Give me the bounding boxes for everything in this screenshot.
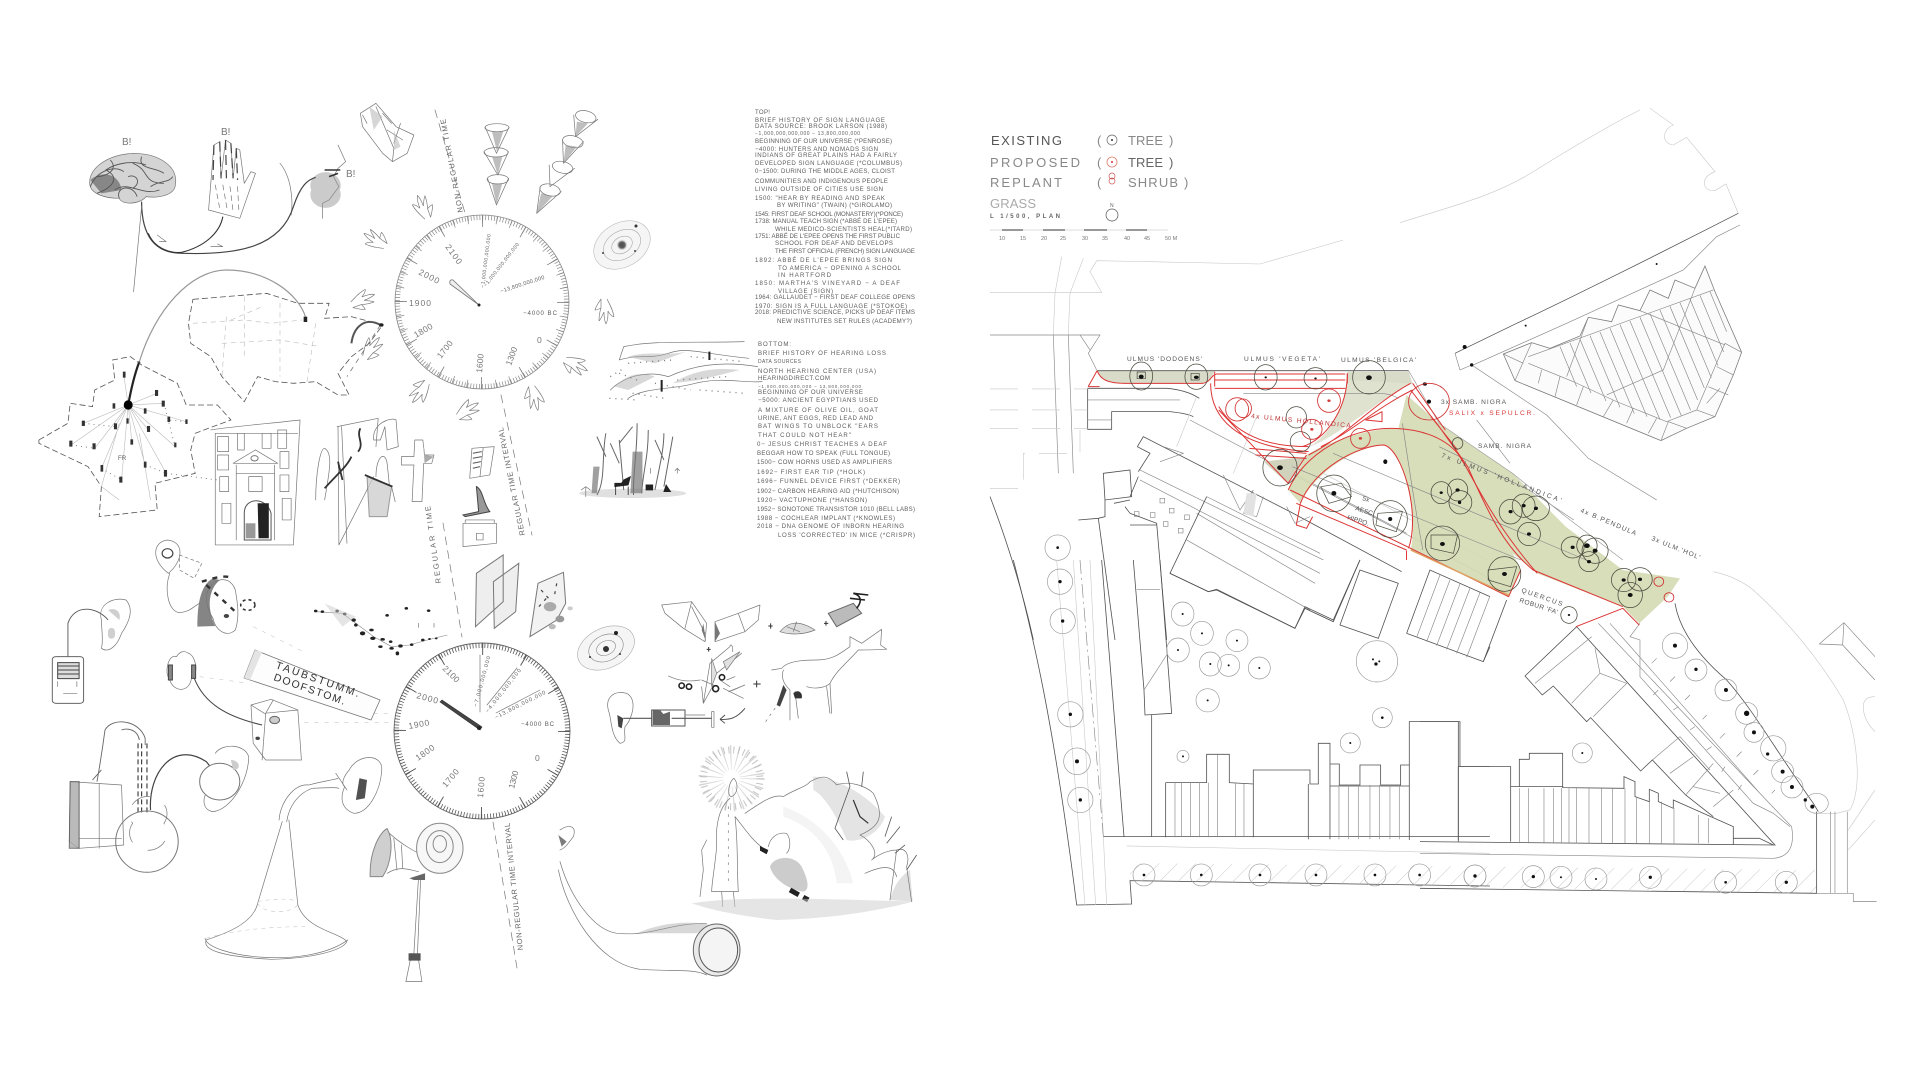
drawing: tall gramophone horn to ear [205,757,382,959]
text block: top notes, brief history of sign language: 1545: FIRST DEAF SCHOOL (MONASTERY)(*PONCE) [755,211,903,218]
text block: bottom notes, brief history of hearing loss: DATA SOURCES [758,359,802,365]
top-left sketch: brain, hand and mouth with tubes [90,140,346,292]
sign: Taubstumm Doofstom torn paper label: DOOFSTOM. [272,672,347,708]
icon: headset wearer connected to box [167,627,396,760]
labels: tree species names: 3x ULM.'HOL' [1650,535,1701,561]
drawing: school building [211,420,300,545]
text block: top notes, brief history of sign language: BEGINNING OF OUR UNIVERSE (*PENROSE) [755,138,892,145]
axis labels: regular and non-regular time: REGULAR TIME INTERVAL [496,427,527,536]
base plan: hatched street tree strip [1130,863,1817,893]
text block: top notes, brief history of sign language: DATA SOURCE: BROOK LARSON (1988) [755,123,887,130]
legend: tree and shrub key with scale and north arrow: 20 [1041,236,1047,242]
dial: hearing loss timeline clock: 2100 [441,663,462,685]
dial: sign language timeline clock: 1700 [435,338,455,360]
dial: sign language timeline clock: −1,000,000,000,000 [483,242,521,288]
dial: sign language timeline clock: 1900 [409,298,431,308]
icon: behind-the-ear device with pocket receiver [52,599,130,703]
drawing: DNA strand and dots [314,603,447,655]
drawing: saint with halo healing a deaf child [692,750,913,920]
drawing: snail shell ear trumpet on stand [370,823,463,982]
icon: galaxy upper [585,211,659,279]
icon: galaxy lower [570,617,642,679]
text block: bottom notes, brief history of hearing loss: 1692− FIRST EAR TIP (*HOLK) [757,469,865,476]
icon: cross [401,440,434,502]
text block: top notes, brief history of sign language: SCHOOL FOR DEAF AND DEVELOPS [775,240,893,247]
text block: top notes, brief history of sign language: TOP! [755,109,770,116]
dial: sign language timeline clock: 1600 [474,353,486,373]
text block: bottom notes, brief history of hearing loss: 1952− SONOTONE TRANSISTOR 1010 (BELL LABS) [757,506,915,513]
drawing: bat wing, moss, ant, olive, goat remedy recipe with syringe and ear [608,593,887,743]
text block: bottom notes, brief history of hearing loss: 1902− CARBON HEARING AID (*HUTCHISON) [757,488,899,495]
legend: tree and shrub key with scale and north arrow: ( [1097,155,1102,170]
axis labels: regular and non-regular time: NON-REGULAR TIME INTERVAL [503,822,525,951]
dial: hearing loss timeline clock: 1900 [408,717,430,731]
text block: bottom notes, brief history of hearing loss: BEGGAR HOW TO SPEAK (FULL TONGUE) [757,450,890,457]
labels: tree species names: AESC. [1354,505,1376,518]
text block: top notes, brief history of sign language: 1738: MANUAL TEACH SIGN (*ABBÉ DE L'EPEE) [755,218,897,225]
labels: tree species names: 4x ULMUS HOLLANDICA [1251,413,1352,430]
legend: tree and shrub key with scale and north arrow: ( [1097,175,1102,190]
text block: bottom notes, brief history of hearing loss: LOSS 'CORRECTED' IN MICE (*CRISPR) [778,532,915,539]
dial: sign language timeline clock: −4000 BC [523,310,558,317]
text block: bottom notes, brief history of hearing loss: THAT COULD NOT HEAR" [758,432,851,439]
legend: tree and shrub key with scale and north arrow: ( [1097,133,1102,148]
dial: hearing loss timeline clock: 2000 [415,690,440,706]
legend: tree and shrub key with scale and north arrow: 35 [1102,236,1108,242]
dial: sign language timeline clock: −1,000,000,000,000 [480,234,493,288]
legend: tree and shrub key with scale and north arrow: 10 [999,236,1005,242]
text block: top notes, brief history of sign language: BRIEF HISTORY OF SIGN LANGUAGE [755,117,885,124]
drawing: long ear trumpet tube [558,827,740,976]
labels: B! exclamations: B! [346,169,355,180]
drawing: hilly landscape with figures [609,342,762,400]
drawing: battery box, body-worn aid and ear with tubes [69,722,249,872]
text block: bottom notes, brief history of hearing loss: NORTH HEARING CENTER (USA) [758,368,876,375]
axis labels: regular and non-regular time: REGULAR TIME [423,505,443,584]
dial: hearing loss timeline clock: 1300 [506,769,521,790]
label: FR on map: FR [118,455,127,462]
dial: sign language timeline clock [395,215,569,389]
drawing: shaded coastline map with birds [745,772,917,902]
text block: bottom notes, brief history of hearing loss: 0− JESUS CHRIST TEACHES A DEAF [757,441,887,448]
text block: top notes, brief history of sign language: INDIANS OF GREAT PLAINS HAD A FAIRLY [755,152,897,159]
base plan: roads and buildings west side [990,240,1487,640]
labels: tree species names [1127,356,1701,616]
dial: hearing loss timeline clock: −4,000,000,000 [485,668,523,714]
legend: tree and shrub key with scale and north arrow: ) [1169,155,1173,170]
dial: sign language timeline clock: 1300 [503,345,519,367]
text block: top notes, brief history of sign language: TO AMERICA − OPENING A SCHOOL [778,265,902,272]
text block: top notes, brief history of sign language: DEVELOPED SIGN LANGUAGE (*COLUMBUS) [755,160,902,167]
base plan: southern buildings, road and trees [1013,560,1490,905]
dial: hearing loss timeline clock: −13,800,000,000 [494,690,547,721]
legend: tree and shrub key with scale and north arrow: ) [1169,133,1173,148]
text block: top notes, brief history of sign language: LIVING OUTSIDE OF CITIES USE SIGN [755,186,883,193]
text block: top notes, brief history of sign language: 1964: GALLAUDET − FIRST DEAF COLLEGE OPENS [755,294,915,301]
legend: tree and shrub key with scale and north arrow: L 1/500, PLAN [990,214,1060,220]
text block: bottom notes, brief history of hearing loss: BAT WINGS TO UNBLOCK "EARS [758,423,878,430]
legend: tree and shrub key with scale and north arrow: PROPOSED [990,155,1080,170]
labels: tree species names: SALIX x SEPULCR. [1449,410,1535,417]
text block: top notes, brief history of sign language: BY WRITING" (TWAIN) (*GIROLAMO) [777,202,892,209]
text block: bottom notes, brief history of hearing loss: −5000: ANCIENT EGYPTIANS USED [758,397,879,404]
text block: top notes, brief history of sign language: 1500: "HEAR BY READING AND SPEAK [755,195,885,202]
legend: tree and shrub key with scale and north arrow: 40 [1124,236,1130,242]
legend: tree and shrub key with scale and north arrow: 45 [1144,236,1150,242]
dial: hearing loss timeline clock: 1800 [413,742,437,763]
base plan: roof of hatched building and north east road [1400,108,1742,500]
text block: top notes, brief history of sign language: NEW INSTITUTES SET RULES (ACADEMY?) [777,318,912,325]
dial: hearing loss timeline clock: −4000 BC [521,721,555,728]
text block: top notes, brief history of sign language: 1850: MARTHA'S VINEYARD − A DEAF [755,280,900,287]
legend: tree and shrub key with scale and north arrow: TREE [1128,155,1163,170]
labels: tree species names: ULMUS 'DODOENS' [1127,356,1202,363]
icon: open book with building [360,103,414,162]
base plan: south east triangle building and road [1420,572,1877,902]
dial: hearing loss timeline clock: 1600 [475,776,487,798]
legend: tree and shrub key with scale and north arrow: 50 M [1165,236,1178,242]
text block: top notes, brief history of sign language: THE FIRST OFFICIAL (FRENCH) SIGN LANGUAGE [775,248,915,255]
labels: tree species names: QUERCUS [1520,587,1564,608]
text block: top notes, brief history of sign language: −4000: HUNTERS AND NOMADS SIGN [755,146,878,153]
text block: top notes, brief history of sign language: IN HARTFORD [778,272,832,279]
legend: tree and shrub key with scale and north arrow: 25 [1060,236,1066,242]
dial: sign language timeline clock: −13,800,000,000 [500,275,545,295]
text block: bottom notes, brief history of hearing loss: 1500− COW HORNS USED AS AMPLIFIERS [757,459,892,466]
text block: bottom notes, brief history of hearing loss: BRIEF HISTORY OF HEARING LOSS [758,350,886,357]
labels: tree species names: 4x B.PENDULA [1579,507,1638,538]
legend: tree and shrub key with scale and north arrow [990,133,1188,242]
text block: top notes, brief history of sign language: 1892: ABBÉ DE L'EPEE BRINGS SIGN [755,257,892,264]
dial: hearing loss timeline clock [394,643,570,819]
labels: tree species names: 7x ULMUS 'HOLLANDICA' [1440,452,1562,504]
text block: top notes, brief history of sign language: 2018: PREDICTIVE SCIENCE, PICKS UP DEAF ITEMS [755,309,915,316]
text block: bottom notes, brief history of hearing loss: −1,000,000,000,000 − 13,800,000,000 [758,384,861,389]
legend: tree and shrub key with scale and north arrow: 30 [1082,236,1088,242]
dial: sign language timeline clock: 2100 [443,242,465,266]
drawing: monk teaching at easel [316,418,398,545]
labels: B! exclamations: B! [122,137,131,148]
legend: tree and shrub key with scale and north arrow: REPLANT [990,175,1062,190]
labels: tree species names: ROBUR 'FA' [1518,597,1559,616]
icons: signing hands around the first dial [348,192,614,425]
text block: top notes, brief history of sign language: 1970: SIGN IS A FULL LANGUAGE (*STOKOE) [755,303,907,310]
text block: top notes, brief history of sign language: WHILE MEDICO-SCIENTISTS HEAL(*ITARD) [775,226,912,233]
text block: bottom notes, brief history of hearing loss: A MIXTURE OF OLIVE OIL, GOAT [758,407,878,414]
legend: tree and shrub key with scale and north arrow: N [1110,203,1114,209]
map: France with radial network of schools [39,357,231,517]
legend: tree and shrub key with scale and north arrow: TREE [1128,133,1163,148]
text block: top notes, brief history of sign language: VILLAGE (SIGN) [778,288,833,295]
icons: open book and tower with hand [463,447,496,547]
labels: tree species names: ULMUS 'BELGICA' [1341,357,1416,364]
panel: right landscape planting plan [990,108,1877,905]
sign: Taubstumm Doofstom torn paper label: TAUBSTUMM. [274,660,361,700]
dial: hearing loss timeline clock: 0 [535,753,540,763]
axis labels: regular and non-regular time [423,110,532,968]
labels: tree species names: SAMB. NIGRA [1478,443,1532,450]
labels: tree species names: ULMUS 'VEGETA' [1244,356,1320,363]
legend: tree and shrub key with scale and north arrow: SHRUB [1128,175,1178,190]
planting plan: green beds, red paths and trees [1088,361,1680,627]
legend: tree and shrub key with scale and north arrow: EXISTING [991,133,1062,148]
labels: B! exclamations [122,127,355,180]
dial: hearing loss timeline clock: −7,000,000,000 [473,656,492,708]
sign: Taubstumm Doofstom torn paper label [244,650,380,720]
text block: top notes, brief history of sign language: COMMUNITIES AND INDIGENOUS PEOPLE [755,178,888,185]
text block: bottom notes, brief history of hearing loss: URINE, ANT EGGS, RED LEAD AND [758,415,874,422]
drawing: bare forest with deer [579,423,686,498]
legend: tree and shrub key with scale and north arrow: 15 [1020,236,1026,242]
labels: tree species names: 3x SAMB. NIGRA [1441,399,1507,406]
text block: top notes, brief history of sign language [755,109,915,325]
text block: top notes, brief history of sign language: −1,000,000,000,000 − 13,800,000,000 [755,131,860,137]
drawing: stacked cochlear paper and mineral fragment [476,555,573,637]
icon: hearing aid with light bulb receiver [156,540,255,633]
text block: top notes, brief history of sign language: 0−1500: DURING THE MIDDLE AGES, CLOIST [755,168,895,175]
text block: bottom notes, brief history of hearing loss: 1988 − COCHLEAR IMPLANT (*KNOWLES) [757,515,895,522]
legend: tree and shrub key with scale and north arrow: GRASS [990,196,1036,211]
panel: left pencil drawing of sign language and hearing loss history [39,103,917,982]
map: USA outline with arc to France [128,270,384,405]
text block: bottom notes, brief history of hearing loss: BOTTOM: [758,341,791,348]
labels: tree species names: 5x [1361,495,1371,504]
axis labels: regular and non-regular time: NON-REGULAR TIME [438,118,465,213]
dial: hearing loss timeline clock: 1700 [440,767,461,789]
icons: stacked cones of time [484,108,599,213]
text block: bottom notes, brief history of hearing loss: BEGINNING OF OUR UNIVERSE [758,389,863,396]
labels: tree species names: HIPPO. [1346,514,1370,528]
dial: sign language timeline clock: 2000 [417,267,441,286]
text block: bottom notes, brief history of hearing loss: 1696− FUNNEL DEVICE FIRST (*DEKKER) [757,478,900,485]
dial: sign language timeline clock: 0 [537,335,542,345]
legend: tree and shrub key with scale and north arrow: ) [1184,175,1188,190]
text block: top notes, brief history of sign language: 1751: ABBÉ DE L'EPEE OPENS THE FIRST PUBLIC [755,233,901,240]
labels: B! exclamations: B! [221,127,230,138]
text block: bottom notes, brief history of hearing loss [757,341,915,539]
text block: bottom notes, brief history of hearing loss: HEARINGDIRECT.COM [758,375,830,382]
text block: bottom notes, brief history of hearing loss: 2018 − DNA GENOME OF INBORN HEARING [757,523,904,530]
dial: sign language timeline clock: 1800 [412,321,435,340]
text block: bottom notes, brief history of hearing loss: 1920− VACTUPHONE (*HANSON) [757,497,867,504]
